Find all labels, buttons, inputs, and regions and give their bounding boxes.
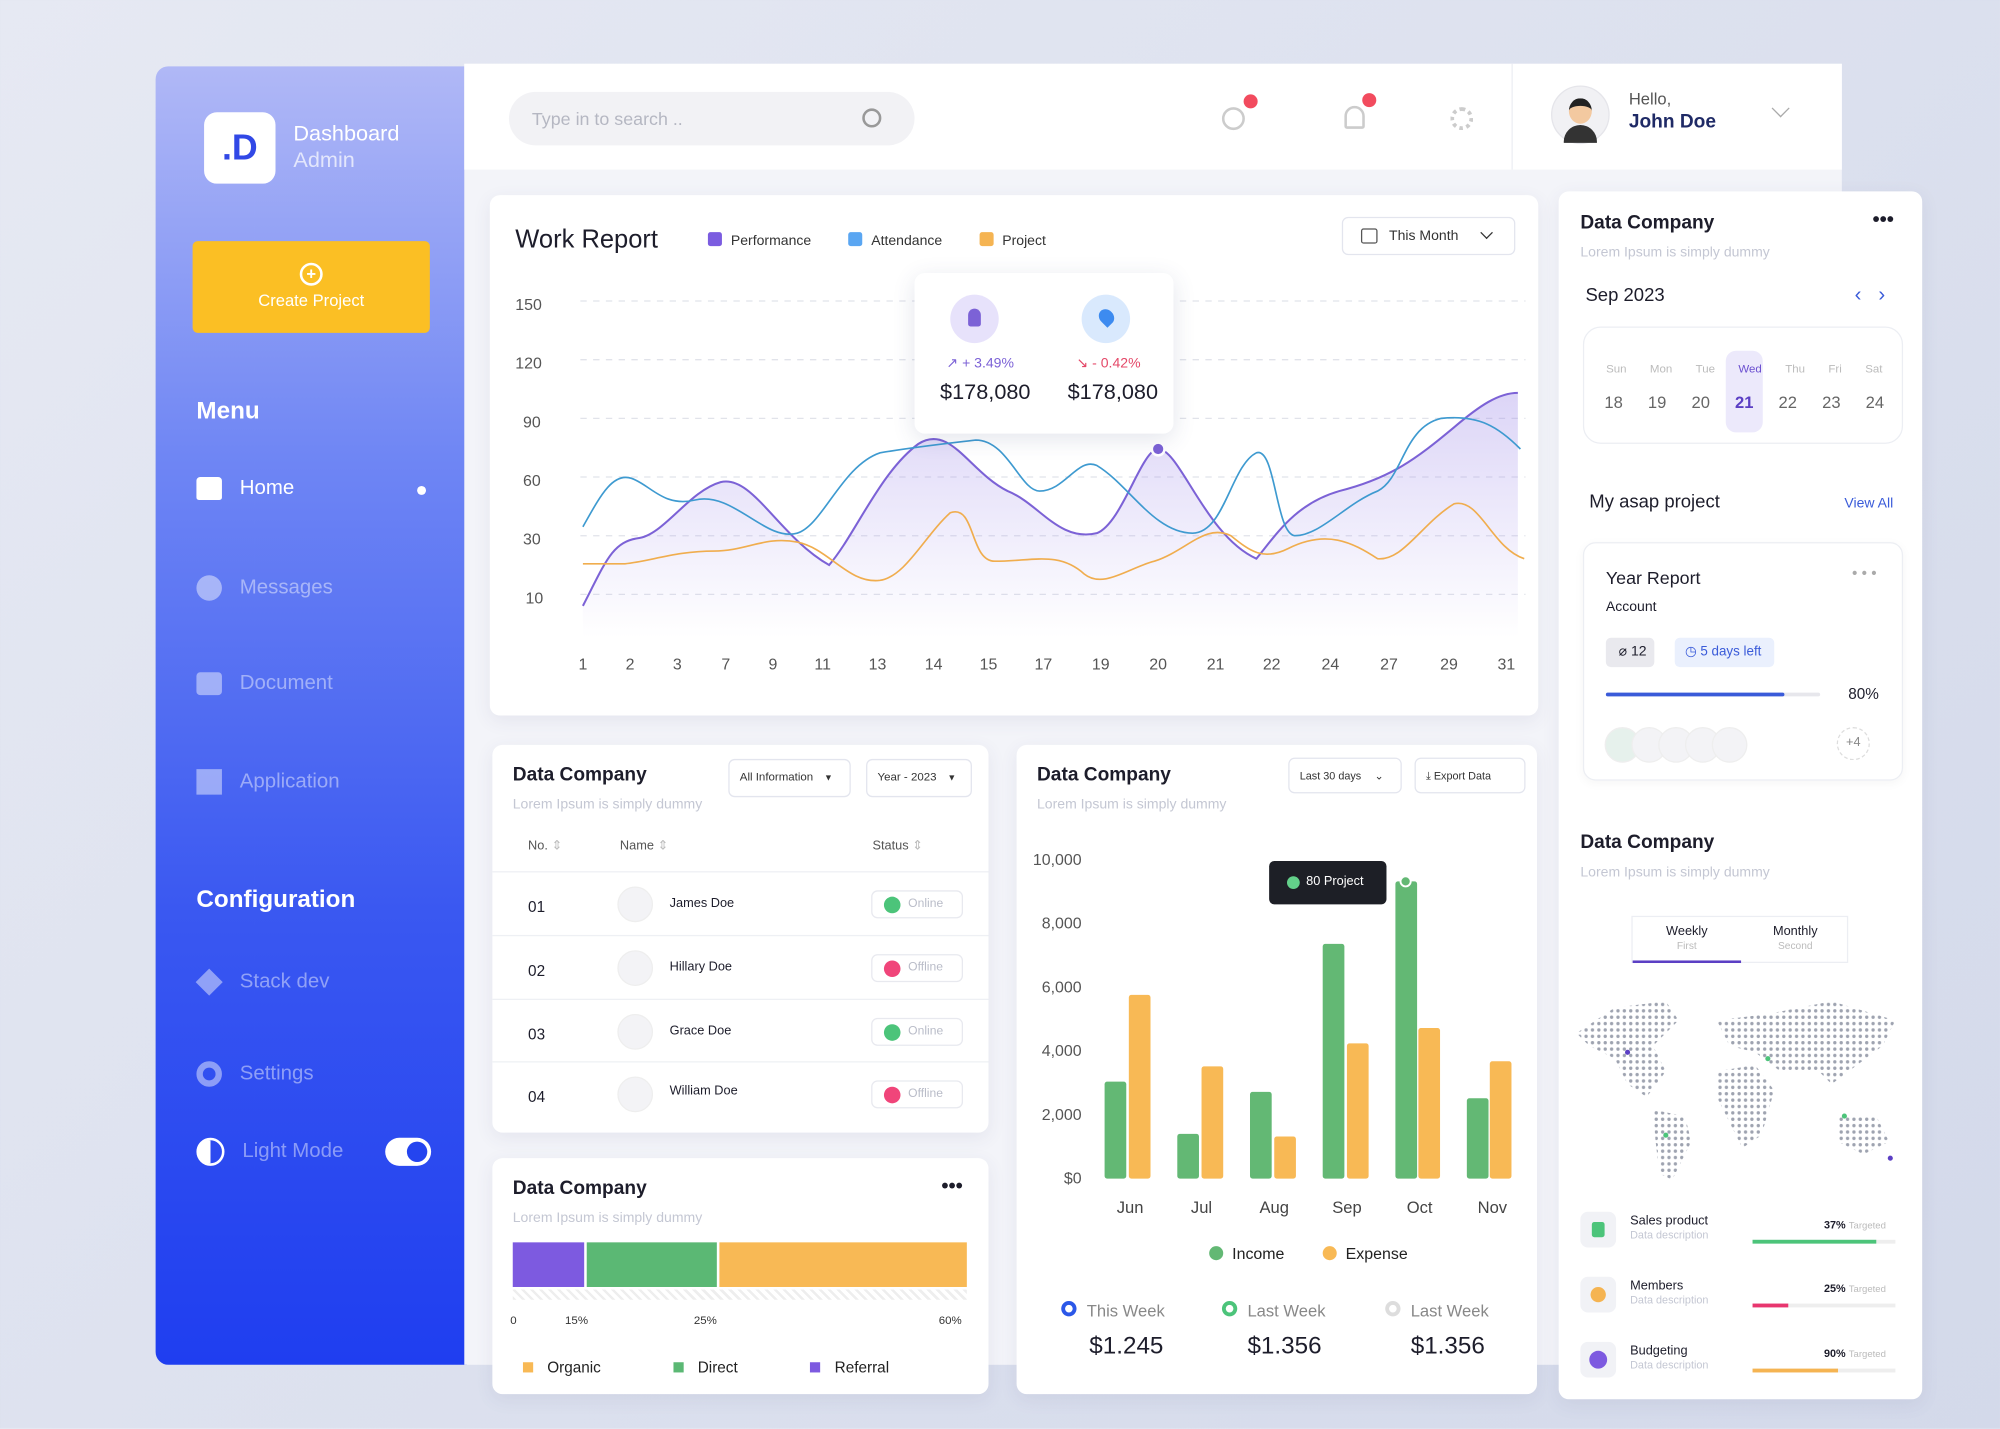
tabs: First [1677, 940, 1697, 952]
calendar: Wed [1738, 362, 1762, 375]
bar chart: Jul [1191, 1198, 1212, 1217]
tabs: Second [1778, 940, 1813, 952]
bar chart: Jun [1117, 1198, 1143, 1217]
bar chart: 6,000 [1042, 979, 1082, 996]
target rows: Data description [1630, 1358, 1708, 1371]
target rows: 25% Targeted [1824, 1282, 1886, 1295]
calendar: Sat [1865, 362, 1882, 375]
line chart: 3 [673, 657, 682, 674]
panel: right column [1559, 191, 1922, 1399]
panel: bar chart data company [1017, 745, 1537, 1394]
panel: data company table: 01 [528, 898, 545, 916]
panel: right column: View All [1844, 496, 1893, 511]
panel: data company table: Offline [908, 960, 943, 974]
line chart: 20 [1149, 657, 1167, 674]
panel: data company table: All Information ▼ [740, 770, 833, 783]
nav: messages [196, 575, 333, 601]
panel: stacked bar data company: 15% [565, 1314, 588, 1327]
calendar: Tue [1696, 362, 1715, 375]
main area [464, 64, 1842, 1365]
calendar: Mon [1650, 362, 1672, 375]
table header [528, 839, 923, 853]
line chart: 2 [626, 657, 635, 674]
text: Last Week [1247, 1301, 1325, 1320]
calendar: 19 [1648, 393, 1666, 412]
project card: ◷ 5 days left [1685, 644, 1761, 659]
panel: right column: Lorem Ipsum is simply dummy [1580, 865, 1770, 880]
table header: No. ⇕ [528, 839, 562, 853]
panel: data company table: Year - 2023 ▼ [878, 770, 956, 783]
brand text: Admin [293, 148, 355, 172]
calendar: 23 [1822, 393, 1841, 412]
panel: data company table: 03 [528, 1026, 545, 1043]
tooltip card: $178,080 [1068, 380, 1158, 404]
bar chart: Aug [1259, 1198, 1289, 1217]
line chart: 150 [515, 297, 542, 314]
line chart: 24 [1321, 657, 1339, 674]
project card [1583, 542, 1903, 781]
line chart: 90 [523, 414, 541, 431]
create project button [193, 241, 430, 333]
project card: Account [1606, 599, 1657, 615]
nav: home: Home [240, 477, 294, 499]
configuration heading: Configuration [196, 886, 355, 913]
panel: work report [490, 195, 1538, 716]
bar tooltip [1269, 861, 1386, 904]
legend: Organic Direct Referral [547, 1358, 889, 1376]
panel: right column: Lorem Ipsum is simply dummy [1580, 245, 1770, 260]
panel: stacked bar data company: 60% [939, 1314, 962, 1327]
brand text: Dashboard [293, 121, 399, 145]
legend: Performance Attendance Project [731, 233, 1046, 249]
world map dots [1578, 1002, 1894, 1178]
line chart: 11 [814, 657, 831, 674]
table header: Name ⇕ [620, 839, 668, 853]
panel: bar chart data company: Lorem Ipsum is simply dummy [1037, 797, 1226, 812]
bar chart: 4,000 [1042, 1043, 1082, 1060]
panel: data company table: 04 [528, 1088, 545, 1106]
panel: bar chart data company: Last 30 days ⌄ [1300, 769, 1384, 782]
menu heading: Menu [196, 398, 260, 425]
panel: work report: Work Report [515, 226, 658, 254]
target rows: Sales product [1630, 1214, 1708, 1228]
panel: data company table: 02 [528, 962, 545, 980]
nav: messages: Messages [240, 577, 333, 599]
nav: light mode toggle: Light Mode [242, 1141, 343, 1162]
line chart: 21 [1207, 657, 1225, 674]
target rows: Data description [1630, 1293, 1708, 1306]
project card: 80% [1848, 685, 1879, 703]
panel: data company table: William Doe [670, 1084, 738, 1098]
calendar: Thu [1785, 362, 1805, 375]
text: Last Week [1411, 1301, 1489, 1320]
panel: right column: ••• [1872, 209, 1894, 231]
line chart: 30 [523, 532, 541, 549]
bar chart: Sep [1332, 1198, 1362, 1217]
target rows: Data description [1630, 1228, 1708, 1241]
bar chart: 8,000 [1042, 916, 1082, 933]
tooltip card: $178,080 [940, 380, 1030, 404]
calendar: 18 [1604, 393, 1623, 412]
bar chart: Oct [1407, 1198, 1433, 1217]
project card: +4 [1846, 736, 1861, 750]
create project button: + [306, 264, 316, 283]
bar tooltip: 80 Project [1306, 875, 1364, 889]
search [509, 92, 915, 145]
panel: right column: Data Company [1580, 832, 1714, 853]
bar chart: $0 [1064, 1171, 1082, 1188]
calendar [1583, 327, 1903, 444]
panel: data company table [492, 745, 989, 1133]
tooltip card: ↗ + 3.49% [946, 356, 1014, 371]
target rows [1580, 1212, 1896, 1378]
calendar: Sun [1606, 362, 1627, 375]
panel: bar chart data company: ⤓ Export Data [1426, 769, 1491, 782]
logo [204, 112, 276, 184]
calendar: Fri [1828, 362, 1842, 375]
project card: • • • [1852, 564, 1877, 582]
text: $1.245 [1089, 1333, 1163, 1360]
target rows: 37% Targeted [1824, 1218, 1886, 1231]
user [1551, 85, 1610, 144]
panel: data company table: Online [908, 1024, 943, 1038]
panel: right column: Sep 2023 [1585, 286, 1665, 306]
line chart: 10 [526, 590, 543, 607]
text: This Week [1087, 1301, 1165, 1320]
panel: data company table: Offline [908, 1087, 943, 1101]
tabs: Weekly [1666, 925, 1708, 939]
panel: right column: ‹ › [1855, 284, 1885, 306]
icons [1222, 107, 1245, 130]
top bar: John Doe [1629, 111, 1716, 133]
line chart: 22 [1263, 657, 1281, 674]
text: $1.356 [1247, 1333, 1322, 1360]
panel: stacked bar data company: 25% [694, 1314, 717, 1327]
panel: data company table: Data Company [513, 764, 647, 786]
line chart: 60 [523, 473, 541, 490]
bar chart: Nov [1478, 1198, 1508, 1217]
top bar: Hello, [1629, 89, 1671, 108]
panel: stacked bar data company [492, 1158, 989, 1394]
panel: stacked bar data company: ••• [941, 1176, 963, 1198]
project card: ⌀ 12 [1619, 644, 1647, 659]
create project button: Create Project [258, 291, 364, 310]
line chart: 29 [1440, 657, 1458, 674]
line chart: 9 [769, 657, 778, 674]
sidebar [156, 66, 467, 1365]
panel: stacked bar data company: Lorem Ipsum is simply dummy [513, 1210, 702, 1226]
tabs [1631, 916, 1848, 963]
table header: Status ⇕ [872, 839, 923, 853]
tabs: Monthly [1773, 925, 1818, 939]
stacked bar [512, 1242, 967, 1300]
target rows: Budgeting [1630, 1344, 1688, 1358]
panel: data company table: James Doe [670, 897, 734, 911]
nav: document: Document [240, 672, 333, 694]
line chart: 14 [925, 657, 943, 674]
nav: home [196, 477, 426, 500]
logo: .D [222, 128, 258, 167]
nav: stack dev: Stack dev [240, 971, 329, 993]
panel: bar chart data company: Data Company [1037, 764, 1171, 786]
nav: light mode toggle [196, 1138, 432, 1166]
weekly stats [1061, 1301, 1489, 1360]
nav: stack dev [196, 968, 330, 996]
target rows: 90% Targeted [1824, 1347, 1886, 1360]
nav: settings [196, 1061, 314, 1087]
brand text [293, 121, 399, 172]
line chart: 15 [980, 657, 998, 674]
calendar: 24 [1866, 393, 1884, 412]
calendar: 20 [1691, 393, 1710, 412]
panel: data company table: Grace Doe [670, 1024, 731, 1038]
project card: Year Report [1606, 568, 1701, 588]
month dropdown [1342, 217, 1515, 255]
line chart: 13 [869, 657, 887, 674]
bar chart: 2,000 [1042, 1107, 1082, 1124]
calendar: 21 [1735, 393, 1753, 412]
line chart: 27 [1380, 657, 1398, 674]
search: Type in to search .. [532, 108, 683, 129]
nav: document [196, 672, 333, 696]
panel: data company table: Lorem Ipsum is simply dummy [513, 797, 702, 812]
line chart: 19 [1092, 657, 1110, 674]
nav: settings: Settings [240, 1063, 314, 1084]
calendar: 22 [1779, 393, 1797, 412]
target rows: Members [1630, 1279, 1683, 1293]
panel: data company table: Online [908, 897, 943, 911]
panel: right column: My asap project [1589, 492, 1720, 513]
panel: stacked bar data company: 0 [510, 1314, 517, 1327]
panel: data company table: Hillary Doe [670, 960, 732, 974]
line chart: 1 [578, 657, 587, 674]
panel: stacked bar data company: Data Company [513, 1177, 647, 1199]
top bar [464, 64, 1842, 170]
panel: right column: Data Company [1580, 212, 1714, 233]
line chart: 17 [1034, 657, 1052, 674]
line chart: 7 [721, 657, 730, 674]
line chart: 120 [515, 356, 542, 373]
bar chart: 10,000 [1033, 852, 1082, 869]
bar legend: Income Expense [1232, 1245, 1408, 1263]
tooltip card [915, 273, 1173, 434]
line chart: 31 [1498, 657, 1515, 674]
nav: application [196, 769, 340, 795]
nav: application: Application [240, 771, 340, 792]
tooltip card: ↘ - 0.42% [1077, 356, 1141, 371]
text: $1.356 [1411, 1333, 1485, 1360]
month dropdown: This Month [1389, 228, 1458, 244]
